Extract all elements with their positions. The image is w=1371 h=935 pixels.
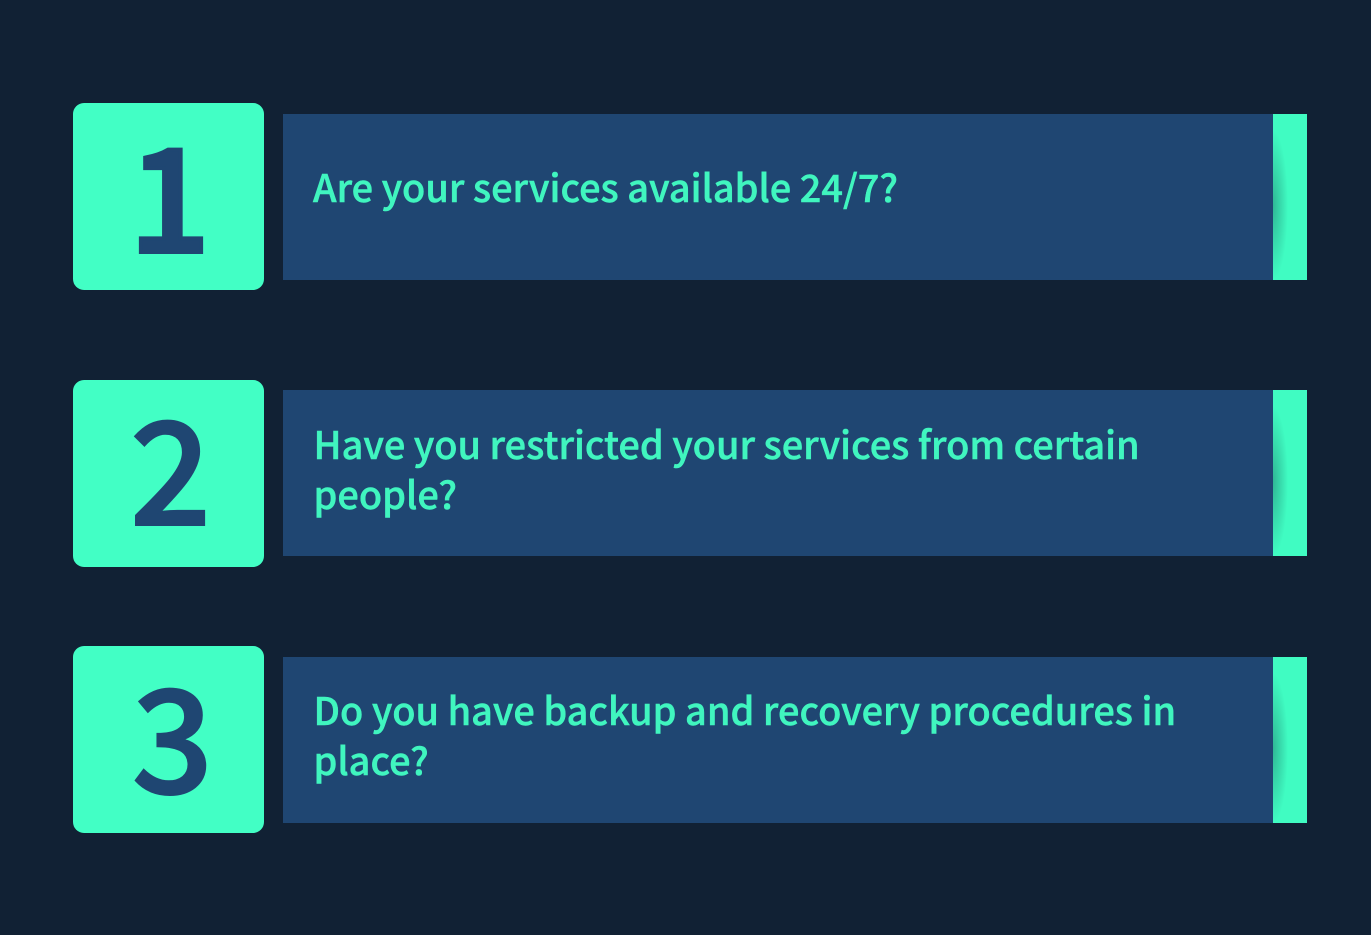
row 2 number box bbox=[73, 380, 264, 567]
row 3 question text: Do you have backup and recovery procedures in bbox=[314, 681, 1176, 736]
row 2 question bar bbox=[283, 390, 1307, 556]
row 2 question text: people? bbox=[314, 465, 457, 520]
row 1 accent tab bbox=[1273, 114, 1307, 280]
row 3 question text bbox=[314, 681, 1176, 786]
row 3 accent tab bbox=[1273, 657, 1307, 823]
number 3: 3 bbox=[132, 628, 213, 835]
row 3 question text: place? bbox=[314, 731, 429, 786]
number 2: 2 bbox=[130, 360, 211, 567]
row 3 number box bbox=[73, 646, 264, 833]
row 1 number box bbox=[73, 103, 264, 290]
row 1 question bar bbox=[283, 114, 1307, 280]
row 2 question text bbox=[314, 415, 1140, 520]
row 2 question text: Have you restricted your services from certain bbox=[314, 415, 1140, 470]
row 3 question bar bbox=[283, 657, 1307, 823]
number 1: 1 bbox=[129, 87, 210, 294]
row 1 question text: Are your services available 24/7? bbox=[313, 158, 898, 213]
row 2 accent tab bbox=[1273, 390, 1307, 556]
